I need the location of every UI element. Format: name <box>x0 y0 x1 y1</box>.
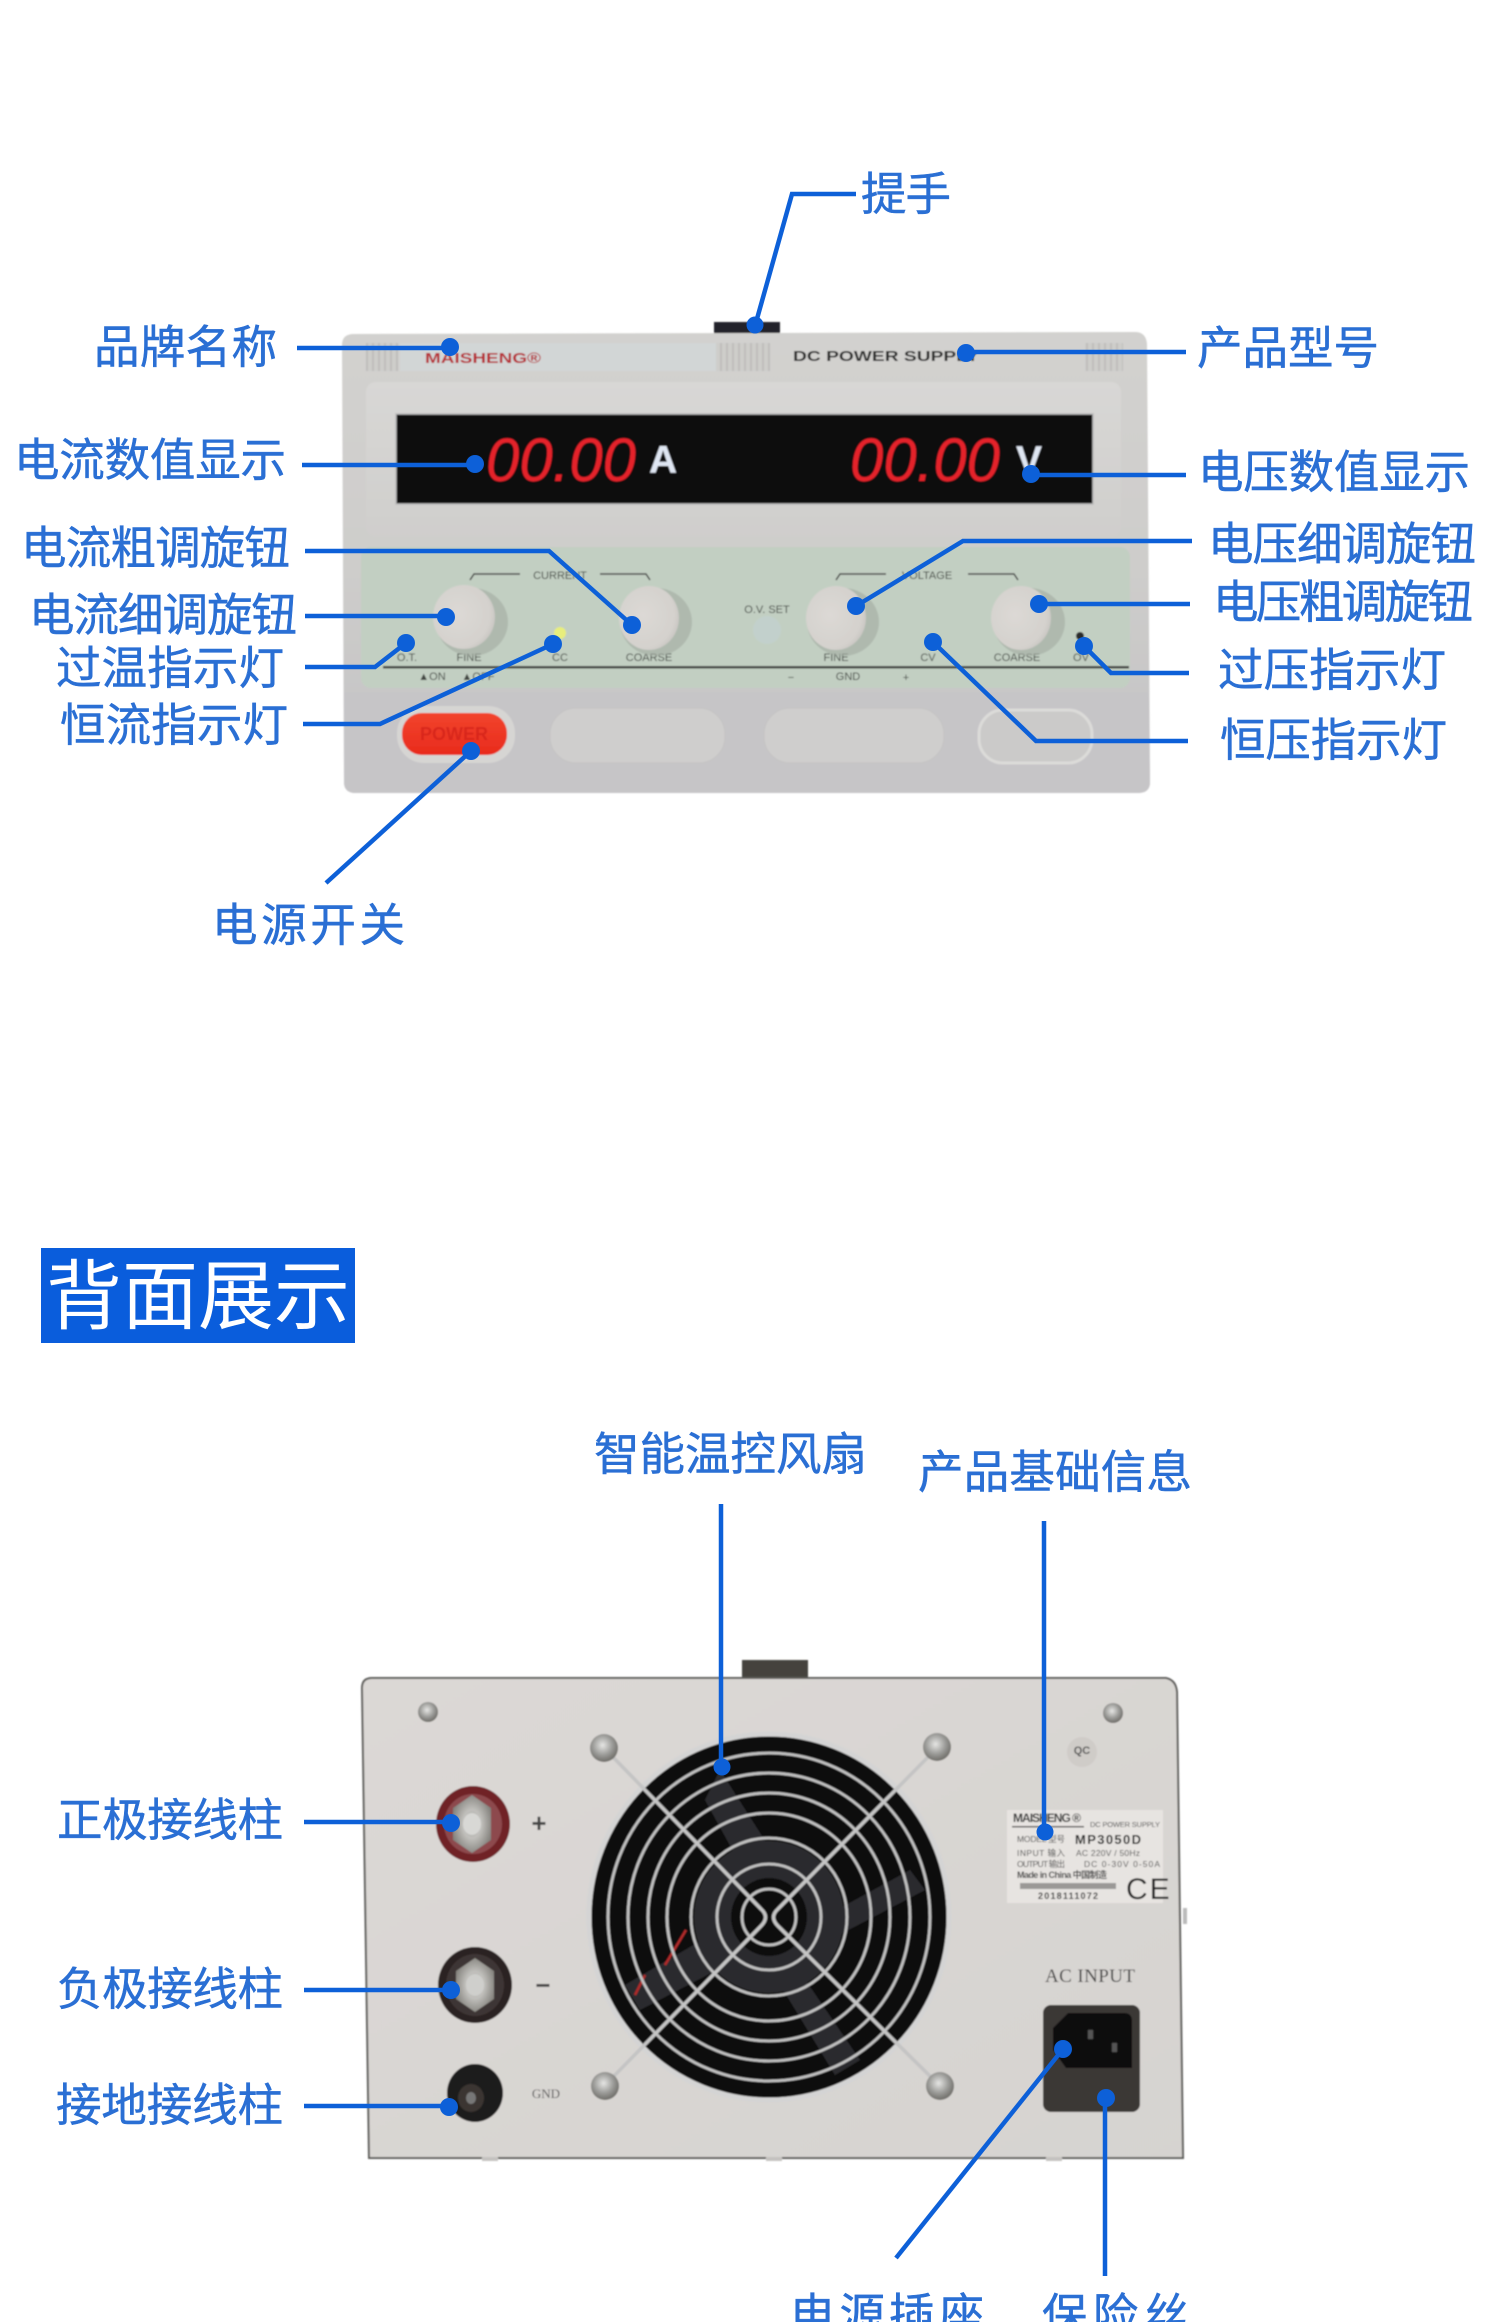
callout: product model <box>957 323 1379 374</box>
callout: over voltage lamp: 过压指示灯 <box>1218 645 1446 696</box>
callout: constant voltage lamp <box>924 633 1447 766</box>
rating label <box>1007 1810 1172 1906</box>
center grille <box>716 343 770 371</box>
control panel <box>361 547 1130 688</box>
voltage fine knob <box>806 586 866 650</box>
display bezel <box>366 382 1121 537</box>
ampere unit: A <box>649 439 677 482</box>
callout: current display: 电流数值显示 <box>14 435 286 486</box>
rating label: DC POWER SUPPLY <box>1090 1820 1160 1829</box>
callout: over temperature lamp: 过温指示灯 <box>56 643 284 694</box>
guard rings <box>608 1753 930 2081</box>
ov set knob <box>753 616 781 644</box>
panel captions: − <box>788 672 794 684</box>
right grille <box>1085 343 1123 371</box>
callout: negative terminal: 负极接线柱 <box>57 1964 283 2015</box>
callout: voltage display <box>1022 447 1470 498</box>
cc lamp <box>554 627 566 639</box>
callout: handle <box>746 169 951 334</box>
current coarse knob <box>619 586 679 650</box>
current bracket <box>470 574 650 580</box>
callout: current display <box>14 435 484 486</box>
rating label: MAISHENG ® <box>1013 1811 1081 1825</box>
callout: positive terminal: 正极接线柱 <box>57 1795 283 1846</box>
negative terminal <box>438 1947 551 2023</box>
top left screw <box>418 1702 438 1722</box>
panel captions: CC <box>552 652 568 664</box>
callout: voltage fine knob <box>847 519 1476 615</box>
panel captions <box>397 570 1090 684</box>
callout: product info: 产品基础信息 <box>918 1447 1192 1498</box>
callout: voltage fine knob: 电压细调旋钮 <box>1208 519 1476 570</box>
callout: brand name: 品牌名称 <box>94 322 277 373</box>
negative terminal: − <box>535 1970 551 2000</box>
callout: constant current lamp: 恒流指示灯 <box>60 700 288 751</box>
callout: power switch <box>212 742 480 951</box>
blank recess 3 <box>979 710 1092 763</box>
rating label: 2018111072 <box>1038 1891 1098 1901</box>
panel captions: GND <box>836 671 860 683</box>
callout: constant current lamp <box>60 635 562 751</box>
rating label: INPUT 输入 <box>1017 1848 1065 1858</box>
qc sticker <box>1067 1737 1097 1767</box>
panel captions: FINE <box>823 652 849 664</box>
panel captions: ▲ON <box>418 671 446 683</box>
positive terminal <box>436 1786 547 1862</box>
callout: power socket <box>790 2040 1072 2322</box>
rating label: OUTPUT 输出 <box>1017 1859 1065 1869</box>
panel captions: COARSE <box>994 652 1040 664</box>
power button surround <box>397 706 515 763</box>
rating label: MP3050D <box>1075 1832 1141 1847</box>
callout: product info <box>918 1447 1192 1840</box>
callout: over temperature lamp <box>56 634 415 694</box>
brand logo: MAISHENG® <box>425 350 541 367</box>
callout: ground terminal <box>56 2080 458 2131</box>
callout: current fine knob: 电流细调旋钮 <box>29 590 297 641</box>
rear panel device <box>362 1660 1187 2161</box>
panel captions: CV <box>920 652 936 664</box>
panel captions: COARSE <box>626 652 672 664</box>
callout: current fine knob <box>29 590 455 641</box>
callout: power switch: 电源开关 <box>212 900 405 951</box>
bottom feet <box>482 2157 1062 2161</box>
rating label: DC 0-30V 0-50A <box>1084 1859 1160 1869</box>
power button <box>402 713 507 755</box>
lower body <box>344 692 1150 793</box>
panel captions: ▲OFF <box>462 671 495 683</box>
panel captions: VOLTAGE <box>902 570 952 582</box>
panel captions: CURRENT <box>533 570 587 582</box>
front panel device <box>342 322 1150 793</box>
heading: rear view: 背面展示 <box>46 1255 350 1340</box>
voltage digits: 00.00 <box>850 426 1000 494</box>
ground terminal <box>447 2064 560 2122</box>
left grille <box>366 343 398 371</box>
panel captions: OV <box>1073 652 1090 664</box>
callout: product model: 产品型号 <box>1197 323 1379 374</box>
fan screws <box>590 1733 954 2100</box>
guard cross wires <box>608 1752 936 2082</box>
callout: voltage coarse knob: 电压粗调旋钮 <box>1213 577 1473 628</box>
voltage coarse knob <box>991 586 1051 650</box>
rating label: CE <box>1126 1873 1172 1906</box>
callout: fuse <box>1042 2089 1189 2322</box>
callout: over voltage lamp <box>1075 637 1446 696</box>
fan housing <box>589 1734 949 2100</box>
top right screw <box>1103 1703 1123 1723</box>
callout: handle: 提手 <box>861 169 951 220</box>
red wires <box>635 1930 686 1995</box>
side bump <box>1183 1908 1187 1924</box>
ac input caption: AC INPUT <box>1045 1966 1135 1987</box>
panel captions: FINE <box>456 652 482 664</box>
panel captions: + <box>903 672 909 684</box>
panel captions: O.V. SET <box>744 604 790 616</box>
fan blades <box>625 1770 925 2075</box>
device body <box>342 332 1150 793</box>
callout: ground terminal: 接地接线柱 <box>56 2080 283 2131</box>
callout: constant voltage lamp: 恒压指示灯 <box>1220 715 1447 766</box>
callout: smart fan: 智能温控风扇 <box>594 1429 867 1480</box>
rating label: MODEL 型号 <box>1017 1834 1065 1844</box>
power button: POWER <box>420 724 488 744</box>
panel captions: O.T. <box>397 652 417 664</box>
rear plate <box>362 1678 1183 2158</box>
callout: positive terminal <box>57 1795 460 1846</box>
fan <box>589 1734 949 2100</box>
volt unit: V <box>1016 439 1042 482</box>
voltage bracket <box>836 574 1018 580</box>
callout: voltage display: 电压数值显示 <box>1198 447 1470 498</box>
handle <box>742 1660 808 1679</box>
baseline rule <box>383 666 1129 668</box>
callout: current coarse knob <box>21 523 641 634</box>
handle <box>714 322 780 336</box>
ov lamp <box>1076 632 1084 640</box>
ground terminal: GND <box>532 2086 560 2101</box>
knob shadows <box>436 588 1065 656</box>
callout: brand name <box>94 322 459 373</box>
current fine knob <box>433 585 495 649</box>
model text: DC POWER SUPPLY <box>793 348 979 365</box>
rating label: AC 220V / 50Hz <box>1076 1848 1140 1858</box>
display screen <box>396 414 1093 504</box>
callout: negative terminal <box>57 1964 460 2015</box>
blank recess 2 <box>764 708 944 763</box>
callout: current coarse knob: 电流粗调旋钮 <box>21 523 290 574</box>
callout: smart fan <box>594 1429 867 1776</box>
qc sticker: QC <box>1074 1745 1090 1757</box>
blank recess 1 <box>550 708 725 763</box>
current digits: 00.00 <box>486 426 636 494</box>
name strip <box>400 343 716 371</box>
rating label: Made in China 中国制造 <box>1017 1869 1107 1880</box>
positive terminal: + <box>531 1808 547 1838</box>
callout: voltage coarse knob <box>1030 577 1473 628</box>
ac socket <box>1043 2005 1140 2112</box>
